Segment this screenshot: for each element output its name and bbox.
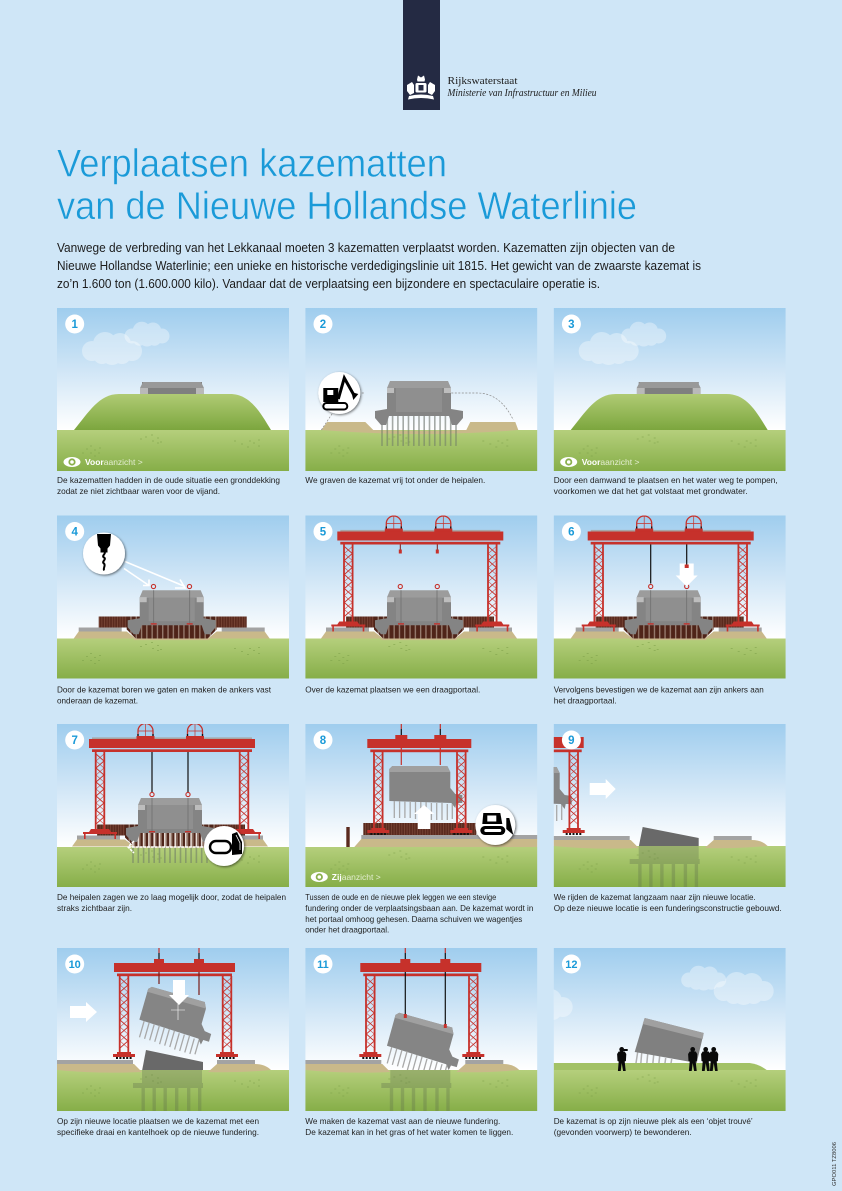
- caption 1: De kazematten hadden in de oude situatie een gronddekking: [57, 475, 280, 485]
- illustration 1: 1: [71, 319, 78, 331]
- caption 7: [57, 892, 286, 913]
- panel 3: [554, 308, 786, 496]
- document code: GPO011 TZ8006: [832, 1142, 838, 1186]
- caption 1: zodat ze niet zichtbaar waren voor de vijand.: [57, 486, 220, 496]
- caption 12: (gevonden voorwerp) te bewonderen.: [554, 1127, 692, 1137]
- panel 12: [513, 948, 786, 1137]
- intro text: Nieuwe Hollandse Waterlinie; een unieke en historische verdedigingslinie uit 1815. Het gewicht van de zwaarste kazemat is: [57, 258, 701, 273]
- caption 4: onderaan de kazemat.: [57, 696, 138, 706]
- badge 10: [65, 954, 84, 974]
- logo text: [447, 76, 596, 99]
- gantry 8: [367, 724, 472, 834]
- badge 5: 5: [320, 526, 327, 538]
- caption 9: Op deze nieuwe locatie is een funderingsconstructie gebouwd.: [554, 903, 782, 913]
- illustration 3: [554, 308, 786, 471]
- caption 3: Door een damwand te plaatsen en het water weg te pompen,: [554, 475, 778, 485]
- badge 2: [314, 314, 332, 334]
- gantry 6: [582, 516, 760, 632]
- arrow down: [169, 980, 189, 1005]
- badge 10: 10: [69, 959, 81, 971]
- panel 5: [305, 516, 537, 695]
- caption 12: De kazemat is op zijn nieuwe plek als een ‘objet trouvé’: [554, 1116, 753, 1126]
- badge 12: 12: [565, 959, 578, 971]
- panel 4: [57, 516, 289, 706]
- caption 3: voorkomen we dat het gat volstaat met grondwater.: [554, 486, 748, 496]
- badge 4: 4: [71, 526, 78, 538]
- illustration 1: [57, 308, 289, 471]
- panel 6: [554, 516, 786, 706]
- badge 6: [562, 522, 581, 541]
- panel 11: [305, 948, 537, 1137]
- title: Verplaatsen kazematten: [57, 142, 447, 186]
- caption 8: Tussen de oude en de nieuwe plek leggen we een stevige: [305, 892, 497, 902]
- panel 2: [305, 308, 537, 485]
- saw arrow: [128, 841, 207, 853]
- caption 4: Door de kazemat boren we gaten en maken de ankers vast: [57, 685, 272, 695]
- caption 7: straks zichtbaar zijn.: [57, 903, 132, 913]
- logo text: Rijkswaterstaat: [448, 76, 518, 87]
- logo text: Ministerie van Infrastructuur en Milieu: [447, 88, 596, 99]
- caption 8: onder het draagportaal.: [305, 924, 389, 934]
- caption 8: het portaal omhoog gehesen. Daarna schuiven we wagentjes: [305, 914, 522, 924]
- caption 8: [305, 892, 534, 934]
- illustration 7: [57, 724, 289, 887]
- badge 9: [562, 730, 581, 750]
- caption 11: De kazemat kan in het gras of het water komen te liggen.: [305, 1127, 513, 1137]
- arrow down: [676, 564, 698, 586]
- caption 11: [305, 1116, 513, 1137]
- title: van de Nieuwe Hollandse Waterlinie: [57, 185, 637, 228]
- caption 11: We maken de kazemat vast aan de nieuwe fundering.: [305, 1116, 500, 1126]
- gantry 10: [113, 948, 238, 1058]
- caption 10: Op zijn nieuwe locatie plaatsen we de kazemat met een: [57, 1116, 259, 1126]
- title: [57, 142, 637, 228]
- caption 1: [57, 475, 280, 496]
- icon: excavator: [318, 372, 360, 414]
- caption 10: specifieke draai en kantelhoek op de nieuwe fundering.: [57, 1127, 259, 1137]
- illustration 1: Vooraanzicht >: [85, 457, 143, 467]
- caption 6: het draagportaal.: [554, 696, 617, 706]
- illustration 8: Zijaanzicht >: [332, 872, 381, 882]
- badge 12: [562, 954, 581, 974]
- arrows: [124, 562, 185, 588]
- illustration 4: [57, 516, 289, 678]
- badge 5: [314, 522, 332, 541]
- badge 9: 9: [568, 735, 575, 747]
- intro text: [57, 240, 701, 291]
- caption 10: [57, 1116, 259, 1137]
- illustration 2: [305, 308, 537, 471]
- icon: coat of arms: [407, 76, 435, 100]
- caption 2: We graven de kazemat vrij tot onder de heipalen.: [305, 475, 485, 485]
- badge 8: [314, 730, 332, 750]
- intro text: Vanwege de verbreding van het Lekkanaal moeten 3 kazematten verplaatst worden. Kazematten zijn objecten van de: [57, 240, 675, 255]
- arrow up: [414, 805, 434, 829]
- caption 9: [554, 892, 782, 913]
- gantry 5: [331, 516, 509, 632]
- illustration 5: [305, 516, 537, 678]
- people: [617, 1047, 718, 1071]
- gantry 11: [359, 948, 484, 1058]
- caption 6: [554, 685, 764, 706]
- illustration 3: Vooraanzicht >: [582, 457, 639, 467]
- badge 2: 2: [320, 319, 326, 331]
- badge 8: 8: [320, 735, 327, 747]
- caption 12: [554, 1116, 753, 1137]
- icon: bulldozer: [475, 805, 515, 845]
- illustration 6: [554, 516, 786, 678]
- badge 4: [65, 522, 84, 541]
- badge 7: [65, 730, 84, 750]
- panel 8: [305, 724, 537, 934]
- illustration 9: [554, 724, 786, 887]
- illustration 10: [57, 948, 289, 1111]
- panel 9: [554, 724, 786, 912]
- arrow right: [70, 1002, 97, 1022]
- illustration 12: [513, 948, 786, 1111]
- panel 10: [57, 948, 289, 1137]
- caption 5: Over de kazemat plaatsen we een draagportaal.: [305, 685, 480, 695]
- illustration 3: 3: [568, 319, 575, 331]
- arrow right: [590, 779, 616, 799]
- panel 1: [57, 308, 289, 496]
- gantry 7: [83, 724, 261, 839]
- intro text: zo’n 1.600 ton (1.600.000 kilo). Vandaar dat de verplaatsing een bijzondere en spectaculaire operatie is.: [57, 276, 600, 291]
- caption 8: fundering onder de verplaatsingsbaan aan. De kazemat wordt in: [305, 903, 534, 913]
- illustration 8: [305, 724, 537, 887]
- caption 3: [554, 475, 778, 496]
- icon: drill: [83, 532, 125, 574]
- badge 11: [314, 954, 332, 974]
- logo bar: [403, 0, 440, 110]
- illustration 11: [305, 948, 537, 1111]
- caption 4: [57, 685, 272, 706]
- icon: chainsaw: [204, 826, 244, 866]
- gantry fragment 9: [554, 737, 585, 834]
- panel 7: [57, 724, 289, 913]
- caption 7: De heipalen zagen we zo laag mogelijk door, zodat de heipalen: [57, 892, 286, 902]
- badge 11: 11: [317, 959, 329, 971]
- caption 9: We rijden de kazemat langzaam naar zijn nieuwe locatie.: [554, 892, 756, 902]
- badge 7: 7: [71, 735, 78, 747]
- badge 6: 6: [568, 526, 575, 538]
- caption 6: Vervolgens bevestigen we de kazemat aan zijn ankers aan: [554, 685, 764, 695]
